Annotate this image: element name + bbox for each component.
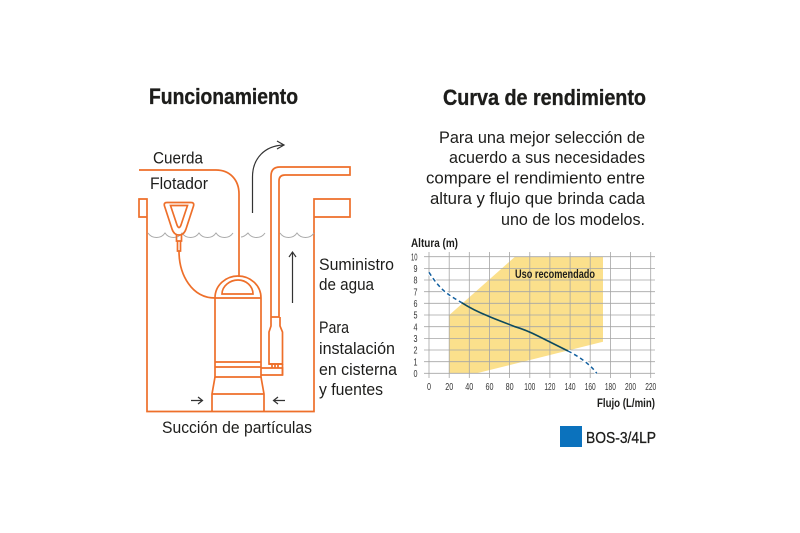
- y axis labels: 2: [414, 346, 418, 357]
- label: Suministro de agua: Suministro: [319, 255, 394, 274]
- float cable: [179, 251, 215, 298]
- legend: [560, 426, 656, 447]
- y axis labels: 1: [414, 357, 418, 368]
- x axis labels: 140: [565, 382, 576, 393]
- text block: description: [426, 128, 646, 229]
- label: installation note: en cisterna: [319, 360, 397, 379]
- y axis labels: 3: [414, 334, 418, 345]
- diagram: pump in cistern: [139, 141, 350, 412]
- text block: description: compare el rendimiento entre: [426, 168, 645, 188]
- heading: Funcionamiento: Funcionamiento: [149, 84, 298, 109]
- label: installation note: [319, 318, 397, 399]
- y axis labels: 8: [414, 276, 418, 287]
- y axis labels: [411, 252, 418, 380]
- text block: description: acuerdo a sus necesidades: [449, 148, 645, 167]
- x axis labels: 120: [544, 382, 556, 393]
- y axis labels: 0: [414, 369, 418, 380]
- label: installation note: Para: [319, 318, 349, 337]
- x axis labels: [427, 382, 656, 393]
- arrow: suction left: [191, 397, 202, 404]
- y axis labels: 5: [414, 311, 418, 322]
- x axis labels: 160: [585, 382, 596, 393]
- performance curve: [429, 272, 597, 373]
- x axis labels: 80: [506, 382, 514, 393]
- cord: [139, 170, 239, 277]
- y axis labels: 9: [414, 264, 418, 275]
- arrow: water supply: [289, 252, 296, 303]
- water surface waves: [148, 233, 314, 238]
- label: Succión de partículas: Succión de partículas: [162, 418, 312, 437]
- x axis labels: 100: [524, 382, 536, 393]
- legend swatch: [560, 426, 582, 447]
- grid: [424, 252, 655, 378]
- label: Cuerda: Cuerda: [153, 148, 203, 168]
- y axis labels: 4: [414, 322, 418, 333]
- float: [164, 202, 194, 251]
- heading: Curva de rendimiento: Curva de rendimiento: [443, 85, 646, 110]
- y axis title: Altura (m): [411, 238, 458, 250]
- x axis labels: 40: [465, 382, 474, 393]
- x axis title: Flujo (L/min): [597, 398, 655, 410]
- legend label: BOS-3/4LP: [586, 430, 656, 447]
- label: installation note: y fuentes: [319, 380, 383, 399]
- cistern walls: [139, 199, 350, 412]
- text block: description: uno de los modelos.: [501, 210, 645, 229]
- y axis labels: 7: [414, 287, 418, 298]
- x axis labels: 200: [625, 382, 636, 393]
- y axis labels: 6: [414, 299, 418, 310]
- text block: description: altura y flujo que brinda cada: [430, 189, 646, 208]
- arrow: suction right: [274, 397, 285, 404]
- x axis labels: 220: [645, 382, 656, 393]
- recommended use area: [449, 257, 603, 373]
- label: Uso recomendado: Uso recomendado: [515, 269, 595, 281]
- x axis labels: 20: [445, 382, 454, 393]
- y axis labels: 10: [411, 252, 418, 263]
- label: Flotador: Flotador: [150, 174, 208, 193]
- x axis labels: 0: [427, 382, 431, 393]
- text block: description: Para una mejor selección de: [439, 128, 645, 147]
- label: installation note: instalación: [319, 339, 395, 358]
- x axis labels: 60: [486, 382, 494, 393]
- pump body: [212, 276, 264, 411]
- x axis labels: 180: [605, 382, 616, 393]
- arrow: discharge flow: [252, 141, 284, 213]
- discharge pipe: [261, 167, 350, 375]
- label: Suministro de agua: de agua: [319, 275, 374, 294]
- label: Suministro de agua: [319, 255, 394, 294]
- chart: performance curve: [411, 238, 656, 410]
